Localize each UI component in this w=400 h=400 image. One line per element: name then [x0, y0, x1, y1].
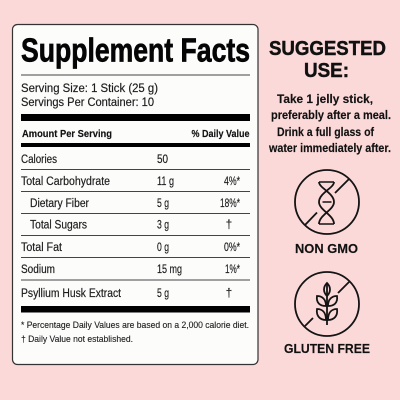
row: total carbohydrate — [21, 176, 240, 188]
heading: suggested use: USE: — [304, 60, 349, 82]
row: total fat: Total Fat — [21, 242, 63, 254]
row: total carbohydrate: 4%* — [224, 176, 240, 188]
text block: directions: Take 1 jelly stick, — [277, 92, 373, 106]
row: total sugars: Total Sugars — [30, 220, 87, 232]
text block: directions: Drink a full glass of — [277, 125, 375, 139]
serving size: Serving Size: 1 Stick (25 g) — [21, 83, 158, 95]
servings per container: Servings Per Container: 10 — [21, 97, 154, 109]
title: Supplement Facts — [21, 32, 250, 70]
row: dietary fiber — [30, 198, 240, 210]
heading: suggested use: SUGGESTED — [269, 38, 386, 60]
row: sodium — [21, 264, 240, 276]
heading: suggested use — [269, 38, 386, 82]
row: dietary fiber: Dietary Fiber — [30, 198, 89, 210]
icon: non gmo — [295, 170, 359, 234]
row: psyllium husk extract — [21, 288, 232, 300]
label: non gmo: NON GMO — [295, 241, 358, 256]
row: total sugars — [30, 220, 232, 232]
text block: directions — [268, 92, 391, 155]
row: dietary fiber: 5 g — [157, 198, 169, 210]
row: calories: Calories — [21, 154, 57, 166]
row: psyllium husk extract: 5 g — [157, 288, 169, 300]
row: total fat — [21, 242, 240, 254]
row: total sugars: 3 g — [157, 220, 169, 232]
text block: directions: preferably after a meal. — [271, 108, 391, 122]
row: psyllium husk extract: Psyllium Husk Extract — [21, 288, 122, 300]
row: total carbohydrate: Total Carbohydrate — [21, 176, 110, 188]
panel: supplement facts — [12, 24, 258, 364]
row: sodium: 15 mg — [157, 264, 182, 276]
label: gluten free: GLUTEN FREE — [284, 341, 370, 356]
row: total fat: 0%* — [224, 242, 240, 254]
row: calories: 50 — [157, 154, 168, 166]
row: total fat: 0 g — [157, 242, 169, 254]
amount per serving header: Amount Per Serving — [22, 129, 112, 140]
footnote: daily value not established: † Daily Value not established. — [21, 334, 133, 345]
row: calories — [21, 154, 168, 166]
row: sodium: Sodium — [21, 264, 55, 276]
row: psyllium husk extract: † — [226, 288, 232, 300]
row: total sugars: † — [226, 220, 232, 232]
row: dietary fiber: 18%* — [220, 198, 240, 210]
row: sodium: 1%* — [225, 264, 240, 276]
row: total carbohydrate: 11 g — [157, 176, 174, 188]
footnote: percentage daily values: * Percentage Daily Values are based on a 2,000 calorie diet. — [21, 320, 249, 331]
icon: gluten free — [295, 272, 359, 336]
daily value header: % Daily Value — [192, 129, 250, 140]
